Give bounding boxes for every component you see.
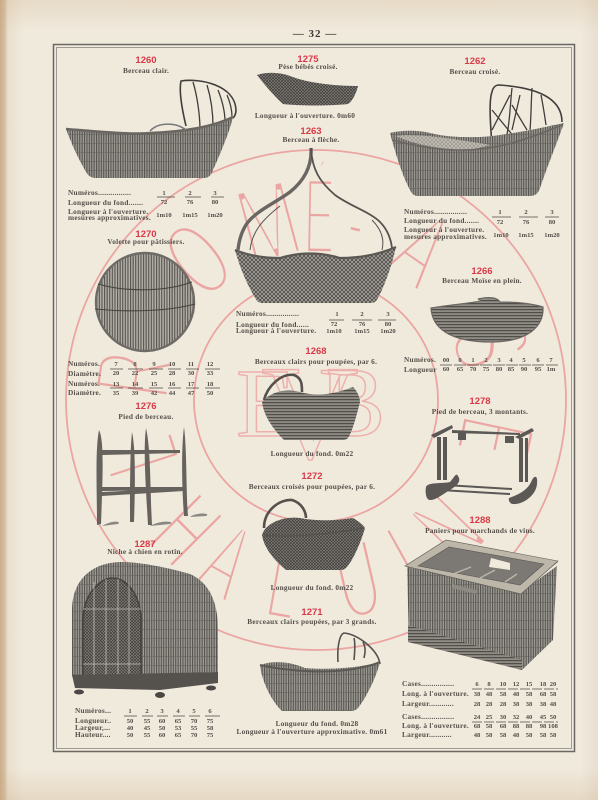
- item 1272: crossed doll cradles: Berceaux croisés pour poupées, par 6.: [249, 482, 375, 491]
- table 1288 first: 15: [526, 681, 533, 688]
- icon: stand: [96, 427, 207, 526]
- table 1266: 60: [443, 366, 450, 373]
- table 1288 second: 58: [550, 732, 557, 739]
- item 1262: crossed cradle: 1262: [464, 56, 486, 67]
- table 1288 second: 48: [513, 732, 520, 739]
- red watermark stamp: E: [431, 407, 559, 469]
- table 1260: Longueur à l'ouverture.: [68, 207, 148, 216]
- table 1288 second: 32: [513, 714, 520, 721]
- table 1266: 4: [509, 357, 513, 364]
- table 1288 first: 10: [500, 681, 507, 688]
- red watermark stamp: H: [127, 471, 245, 589]
- table 1266: 5: [522, 357, 526, 364]
- table 1287: 53: [175, 725, 182, 732]
- icon: sphere: [95, 253, 195, 351]
- red watermark stamp: L: [258, 519, 310, 645]
- table 1287: 70: [191, 718, 198, 725]
- table 1263: Longueur à l'ouverture.: [236, 326, 316, 335]
- table 1262: 1m15: [518, 232, 534, 239]
- page number: — 32 —: [292, 28, 337, 40]
- table 1266: 70: [470, 366, 477, 373]
- table 1270: 42: [151, 390, 158, 397]
- icon: Moses cradle: [431, 298, 543, 342]
- table 1287: 50: [127, 732, 134, 739]
- table 1287: 50: [159, 725, 166, 732]
- table 1288 first: 28: [474, 701, 481, 708]
- table 1266: 80: [496, 366, 503, 373]
- item 1268: doll cradles: Longueur du fond. 0m22: [271, 449, 354, 458]
- table 1262: mesures approximatives.: [404, 232, 487, 241]
- item 1263: cradle with spire: Berceau à flèche.: [282, 135, 340, 144]
- table 1260: 1m20: [207, 212, 223, 219]
- red watermark stamp: O: [140, 197, 255, 321]
- table 1287: 2: [145, 708, 149, 715]
- table 1263: 1: [335, 311, 339, 318]
- table 1263: 76: [359, 321, 366, 328]
- table 1288 second: 48: [474, 732, 481, 739]
- item 1278: stand with 3 uprights: [426, 396, 537, 504]
- table 1287: 75: [207, 732, 214, 739]
- item 1260: cradle: Berceau clair.: [123, 66, 169, 75]
- item 1263: cradle with spire: 1263: [300, 126, 322, 137]
- item 1270: pastry cover: Volette pour pâtissiers.: [107, 237, 185, 246]
- table 1287: Largeur,...: [75, 723, 110, 732]
- table 1266: Longueur: [404, 365, 437, 374]
- table 1270: 7: [114, 361, 118, 368]
- table 1266: 75: [483, 366, 490, 373]
- item 1268: doll cradles: 1268: [305, 346, 327, 357]
- table 1287: 65: [175, 732, 182, 739]
- table 1260: 1m10: [156, 212, 172, 219]
- red watermark stamp: -: [335, 160, 379, 283]
- table 1270: 50: [207, 390, 214, 397]
- table 1260: 80: [212, 199, 219, 206]
- table 1288 second: [402, 712, 559, 739]
- table 1270: Numéros.: [68, 359, 100, 368]
- table 1266: 6: [536, 357, 540, 364]
- table 1270: 8: [133, 361, 137, 368]
- table 1266: 1: [471, 357, 475, 364]
- table 1288 second: 25: [486, 714, 493, 721]
- table 1288 second: 24: [474, 714, 481, 721]
- table 1270: 44: [169, 390, 176, 397]
- table 1288 first: 8: [487, 681, 491, 688]
- item 1263: cradle with spire: [235, 126, 396, 303]
- table 1288 first: 68: [540, 691, 547, 698]
- table 1260: 3: [213, 190, 217, 197]
- table 1262: 80: [549, 219, 556, 226]
- table 1287: 60: [159, 718, 166, 725]
- item 1271: doll cradles with hood: Longueur du fond. 0m28: [276, 719, 359, 728]
- table 1288 second: 88: [526, 723, 533, 730]
- table 1270: 15: [151, 381, 158, 388]
- icon: crate: [405, 540, 558, 670]
- red watermark stamp: I: [369, 504, 442, 619]
- table 1262: 1m10: [493, 232, 509, 239]
- table 1266: 1m: [547, 366, 556, 373]
- item 1266: woven Moses cradle: Berceau Moïse en plein.: [442, 276, 522, 285]
- item 1276: cradle stand: 1276: [135, 401, 157, 412]
- table 1288 second: 30: [500, 714, 507, 721]
- item 1262: crossed cradle: Berceau croisé.: [450, 67, 500, 76]
- table 1287: Numéros...: [75, 706, 111, 715]
- item 1287: dog kennel: [72, 539, 218, 698]
- icon: scale basket: [257, 73, 358, 106]
- table 1288 first: 48: [513, 691, 520, 698]
- table 1270: 39: [132, 390, 139, 397]
- table 1287: Longueur..: [75, 716, 111, 725]
- table 1260: mesures approximatives.: [68, 213, 151, 222]
- table 1270: 13: [113, 381, 120, 388]
- table 1288 second: 58: [500, 732, 507, 739]
- icon: rocking stand: [426, 425, 537, 504]
- table 1270: Numéros.: [68, 379, 100, 388]
- table 1266: 3: [497, 357, 501, 364]
- table 1288 first: 38: [513, 701, 520, 708]
- table 1288 second: 68: [500, 723, 507, 730]
- item 1278: stand with 3 uprights: Pied de berceau, 3 montants.: [432, 407, 528, 416]
- table 1287: 45: [144, 725, 151, 732]
- table 1270: 16: [169, 381, 176, 388]
- table 1288 second: 58: [486, 723, 493, 730]
- table 1270: 28: [169, 370, 176, 377]
- table 1262: Longueur à l'ouverture.: [404, 225, 484, 234]
- table 1266: 90: [521, 366, 528, 373]
- table 1287: 6: [208, 708, 212, 715]
- table 1287: Hauteur....: [75, 730, 111, 739]
- table 1288 first: 48: [486, 691, 493, 698]
- table 1288 first: 28: [486, 701, 493, 708]
- table 1287: 55: [191, 725, 198, 732]
- table 1288 first: 38: [526, 701, 533, 708]
- table 1263: Numéros................: [236, 309, 299, 318]
- icon: kennel: [72, 562, 218, 698]
- table 1287: 5: [192, 708, 196, 715]
- table 1270: 35: [113, 390, 120, 397]
- table 1262: Longueur du fond.......: [404, 216, 479, 225]
- table 1266: 7: [549, 357, 553, 364]
- red watermark stamp: É: [303, 155, 336, 278]
- table 1260: [68, 188, 224, 222]
- table 1288 first: 20: [550, 681, 557, 688]
- table 1260: Longueur du fond.......: [68, 198, 143, 207]
- table 1287: 58: [207, 725, 214, 732]
- table 1288 first: 58: [526, 691, 533, 698]
- table 1288 second: 50: [550, 714, 557, 721]
- red watermark stamp: [66, 150, 566, 650]
- table 1263: 1m20: [380, 328, 396, 335]
- table 1288 first: Long. à l'ouverture.: [402, 689, 469, 698]
- red watermark stamp: S: [425, 304, 555, 383]
- table 1266: Numéros.: [404, 355, 436, 364]
- table 1288 second: 68: [474, 723, 481, 730]
- table 1270: 9: [152, 361, 156, 368]
- table 1270: 33: [207, 370, 214, 377]
- table 1266: 95: [535, 366, 542, 373]
- table 1288 second: 88: [513, 723, 520, 730]
- item 1275: baby scale basket: 1275: [297, 54, 319, 65]
- table 1270: 22: [132, 370, 139, 377]
- table 1270: 18: [207, 381, 214, 388]
- item 1266: woven Moses cradle: [431, 266, 543, 342]
- item 1270: pastry cover: [95, 229, 195, 351]
- table 1288 first: 58: [500, 691, 507, 698]
- item 1268: doll cradles: Berceaux clairs pour poupées, par 6.: [255, 357, 377, 366]
- table 1288 first: 38: [540, 701, 547, 708]
- item 1272: crossed doll cradles: 1272: [301, 471, 323, 482]
- item 1266: woven Moses cradle: 1266: [471, 266, 493, 277]
- red watermark stamp: V: [261, 339, 359, 488]
- item 1278: stand with 3 uprights: 1278: [469, 396, 491, 407]
- table 1270: 11: [188, 361, 194, 368]
- table 1260: 1: [162, 190, 166, 197]
- item 1287: dog kennel: 1287: [134, 539, 156, 550]
- red watermark stamp: B: [319, 347, 385, 458]
- item 1272: crossed doll cradles: Longueur du fond. 0m22: [271, 583, 354, 592]
- table 1288 first: Cases................: [402, 679, 454, 688]
- table 1270: 30: [188, 370, 195, 377]
- icon: doll cradle 1272: [262, 500, 365, 570]
- item 1271: doll cradles with hood: Longueur à l'ouverture approximative. 0m61: [237, 727, 388, 736]
- table 1288 second: 40: [526, 714, 533, 721]
- table 1287: 50: [127, 718, 134, 725]
- item 1288: wine merchant baskets: 1288: [469, 515, 491, 526]
- table 1262: 1: [498, 209, 502, 216]
- table 1288 second: 98: [540, 723, 547, 730]
- item 1270: pastry cover: 1270: [135, 229, 157, 240]
- table 1262: 1m20: [544, 232, 560, 239]
- red watermark stamp: M: [224, 155, 313, 290]
- table 1263: 2: [360, 311, 364, 318]
- item 1275: baby scale basket: Pèse bébés croisé.: [278, 62, 338, 71]
- table 1260: 76: [187, 199, 194, 206]
- table 1262: 72: [497, 219, 504, 226]
- table 1287: [75, 706, 220, 739]
- table 1263: 1m10: [326, 328, 342, 335]
- table 1270: 10: [169, 361, 176, 368]
- table 1270: Diamètre.: [68, 369, 101, 378]
- table 1288 second: 58: [486, 732, 493, 739]
- table 1263: 80: [385, 321, 392, 328]
- red watermark stamp: L: [79, 423, 205, 490]
- red watermark stamp: E: [236, 350, 296, 458]
- table 1266: 65: [457, 366, 464, 373]
- item 1271: doll cradles with hood: Berceaux clairs poupées, par 3 grands.: [247, 617, 377, 626]
- item 1260: cradle: 1260: [135, 55, 157, 66]
- table 1266: 00: [443, 357, 450, 364]
- table 1266: 0: [458, 357, 462, 364]
- item 1268: doll cradles: [255, 346, 377, 458]
- red watermark stamp: E: [94, 260, 220, 356]
- table 1288 first: 28: [500, 701, 507, 708]
- table 1287: 60: [159, 732, 166, 739]
- item 1276: cradle stand: Pied de berceau.: [118, 412, 174, 421]
- table 1260: Numéros................: [68, 188, 131, 197]
- table 1287: 1: [128, 708, 132, 715]
- red watermark stamp: R: [70, 344, 198, 405]
- table 1287: 55: [144, 718, 151, 725]
- item 1271: doll cradles with hood: [237, 607, 388, 736]
- item 1276: cradle stand: [96, 401, 207, 526]
- table 1287: 55: [144, 732, 151, 739]
- item 1275: baby scale basket: [255, 54, 358, 120]
- table 1288 second: Cases................: [402, 712, 454, 721]
- item 1287: dog kennel: Niche à chien en rotin.: [107, 547, 183, 556]
- table 1287: 40: [127, 725, 134, 732]
- item 1260: cradle: [66, 55, 236, 178]
- table 1263: 3: [386, 311, 390, 318]
- icon: doll cradle 1268: [262, 375, 360, 440]
- table 1288 second: 58: [526, 732, 533, 739]
- icon: cradle 1263: [235, 148, 396, 303]
- red watermark stamp: U: [322, 515, 393, 644]
- table 1270: 20: [113, 370, 120, 377]
- table 1288 first: [402, 679, 558, 708]
- item 1271: doll cradles with hood: 1271: [301, 607, 323, 618]
- table 1288 second: 45: [540, 714, 547, 721]
- icon: doll cradle 1271: [260, 633, 380, 711]
- table 1270: Diamètre.: [68, 388, 101, 397]
- table 1288 second: 108: [548, 723, 559, 730]
- table 1288 second: Largeur...........: [402, 730, 452, 739]
- icon: cradle 1262: [390, 85, 564, 196]
- item 1275: baby scale basket: Longueur à l'ouverture. 0m60: [255, 111, 355, 120]
- table 1263: 1m15: [354, 328, 370, 335]
- red watermark stamp: A: [179, 498, 275, 625]
- table 1266: 85: [508, 366, 515, 373]
- table 1288 first: 48: [550, 701, 557, 708]
- table 1262: [404, 207, 560, 241]
- item 1272: crossed doll cradles: [249, 471, 375, 592]
- table 1263: [236, 309, 396, 335]
- table 1266: 2: [484, 357, 488, 364]
- table 1262: 3: [550, 209, 554, 216]
- table 1287: 4: [176, 708, 180, 715]
- table 1288 first: 18: [540, 681, 547, 688]
- table 1288 first: 38: [474, 691, 481, 698]
- table 1288 first: Largeur............: [402, 699, 454, 708]
- table 1270: 47: [188, 390, 195, 397]
- red watermark stamp: N: [389, 470, 508, 586]
- item 1288: wine merchant baskets: Paniers pour marchands de vins.: [425, 526, 535, 535]
- table 1270: 12: [207, 361, 214, 368]
- table 1263: Longueur du fond......: [236, 320, 309, 329]
- table 1270: 14: [132, 381, 139, 388]
- table 1270: 25: [151, 370, 158, 377]
- table 1262: Numéros................: [404, 207, 467, 216]
- table 1288 first: 12: [513, 681, 520, 688]
- item 1288: wine merchant baskets: [405, 515, 558, 670]
- table 1270: 17: [188, 381, 195, 388]
- table 1263: 72: [331, 321, 338, 328]
- table 1260: 72: [161, 199, 168, 206]
- table 1287: 3: [160, 708, 164, 715]
- table 1260: 2: [188, 190, 192, 197]
- table 1287: 75: [207, 718, 214, 725]
- table 1270: [68, 359, 220, 397]
- table 1266: [404, 355, 558, 374]
- icon: cradle 1260: [66, 80, 236, 178]
- table 1260: 1m15: [182, 212, 198, 219]
- table 1288 first: 58: [550, 691, 557, 698]
- table 1288 second: Long. à l'ouverture.: [402, 721, 469, 730]
- item 1262: crossed cradle: [390, 56, 564, 196]
- table 1287: 65: [175, 718, 182, 725]
- table 1262: 76: [523, 219, 530, 226]
- red watermark stamp: A: [368, 187, 474, 313]
- table 1287: 70: [191, 732, 198, 739]
- table 1288 second: 58: [540, 732, 547, 739]
- table 1262: 2: [524, 209, 528, 216]
- page frame: [54, 44, 574, 752]
- table 1288 first: 6: [475, 681, 479, 688]
